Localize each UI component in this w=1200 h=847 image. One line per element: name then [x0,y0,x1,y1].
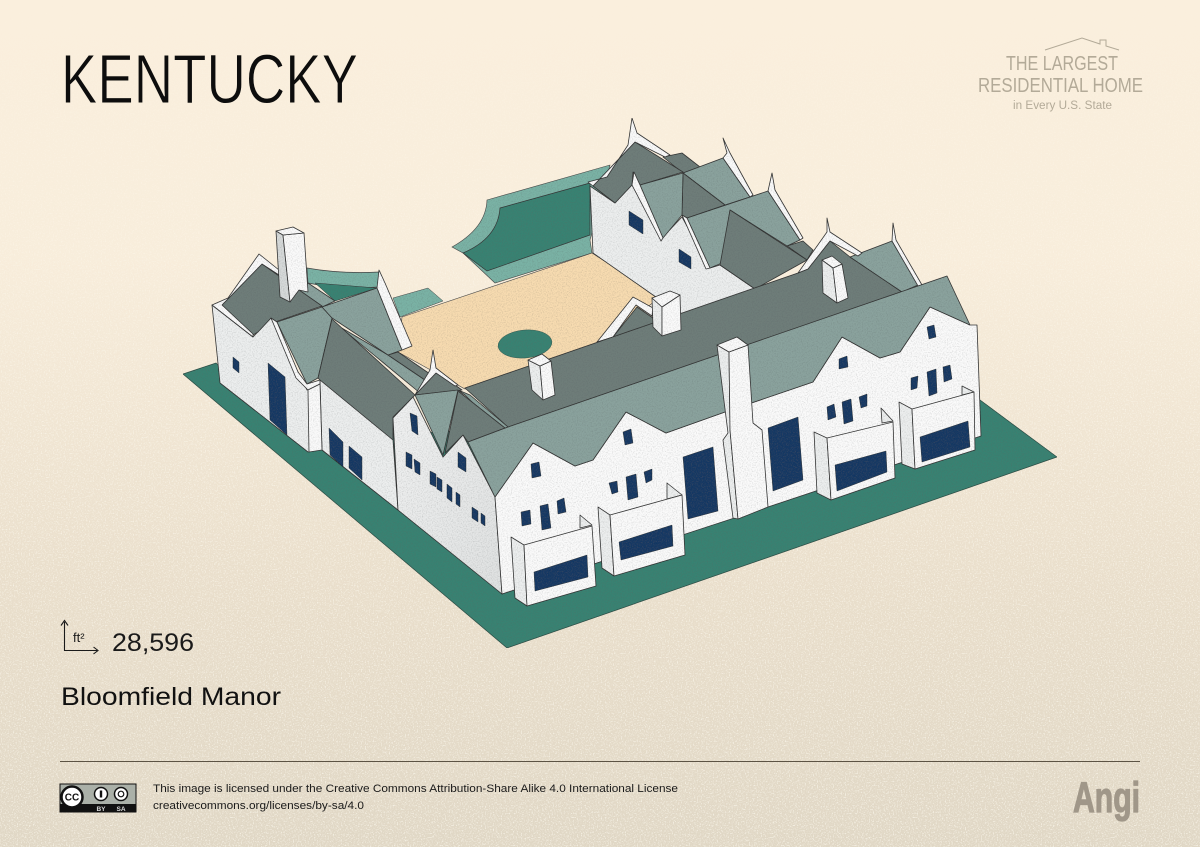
left garden [307,268,443,317]
back wing windows [629,211,691,269]
series heading: RESIDENTIAL HOME [978,75,1143,97]
series heading: THE LARGEST [1006,53,1118,75]
brand logo: Angi [1073,774,1140,822]
license badge [60,784,136,813]
icon: area axes: ft² [73,630,85,645]
front wall windows [521,325,952,530]
front wall [495,307,981,594]
house illustration [183,118,1057,648]
series heading [978,53,1143,97]
area value: 28,596 [112,629,194,657]
small courtyard gable [597,297,653,342]
chimney: front tall [717,337,768,519]
left wing windows and door [233,357,362,480]
back wing [588,118,813,342]
chimney: rear right [822,256,848,303]
chimney: left [276,227,308,302]
series subheading: in Every U.S. State [1013,100,1112,112]
front wing [468,276,981,606]
courtyard oval [497,328,553,360]
license text: creativecommons.org/licenses/by-sa/4.0 [153,800,364,812]
pilaster [308,384,322,452]
long roof [465,218,922,427]
license badge: SA [116,806,126,813]
bay 2 [598,483,685,576]
license badge: CC [65,792,79,804]
bay 3 [814,408,895,500]
courtyard [398,253,660,389]
divider [60,761,1140,762]
icon: house roofline [1045,38,1119,50]
middle gable [393,350,508,594]
area stat [61,620,194,657]
home name: Bloomfield Manor [61,683,281,711]
middle gable windows [406,413,485,526]
bay 1 [511,515,596,606]
bay 4 [899,386,975,469]
title: KENTUCKY [61,40,358,118]
chimney: courtyard front [528,354,555,400]
left wing [212,227,430,510]
series logo [978,38,1143,112]
license text [153,783,678,812]
license badge: BY [96,806,106,813]
front roof [468,276,970,497]
ground [183,363,1057,648]
back garden [452,165,610,283]
license text: This image is licensed under the Creative Commons Attribution-Share Alike 4.0 International License [153,783,678,795]
chimney: middle [652,291,681,336]
